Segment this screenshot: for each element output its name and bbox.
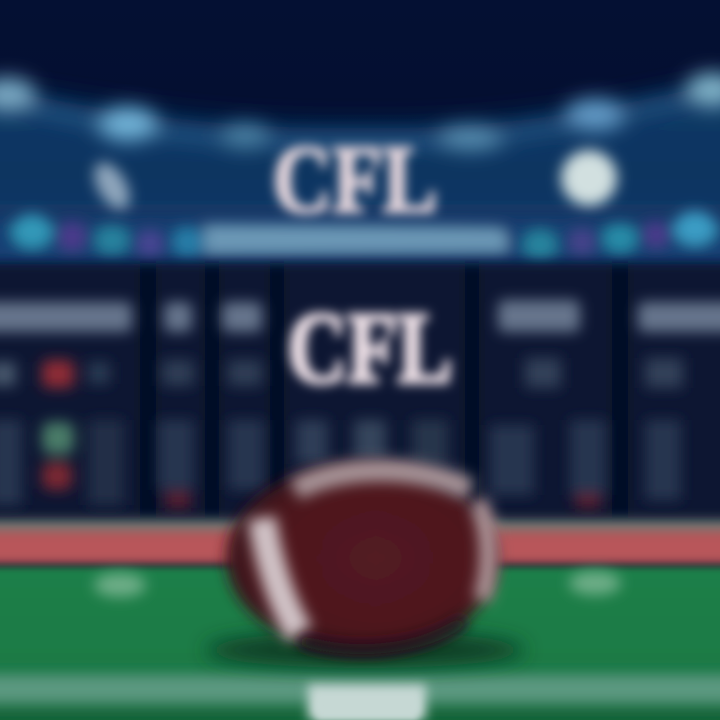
ball left stripe xyxy=(262,518,300,634)
floodlight left xyxy=(87,156,137,216)
running track xyxy=(0,520,720,565)
ball right stripe xyxy=(478,500,488,600)
white centre line xyxy=(308,684,426,720)
field markings xyxy=(0,571,720,704)
ball top band xyxy=(295,470,470,490)
football field xyxy=(0,567,720,720)
ball shadow xyxy=(205,632,525,668)
scoreboard rows xyxy=(0,358,683,508)
scoreboard CFL logo: CFL xyxy=(288,292,452,405)
ball body xyxy=(226,464,498,652)
stadium roof lights xyxy=(0,73,720,150)
scoreboard panel xyxy=(0,264,720,518)
football xyxy=(226,464,498,652)
scoreboard header labels xyxy=(0,300,720,332)
colored banner strip xyxy=(0,211,720,260)
upper CFL sign: CFL xyxy=(272,126,438,234)
ball dark lower edge xyxy=(300,620,465,649)
stadium stands xyxy=(0,70,720,270)
floodlight right xyxy=(561,150,617,206)
